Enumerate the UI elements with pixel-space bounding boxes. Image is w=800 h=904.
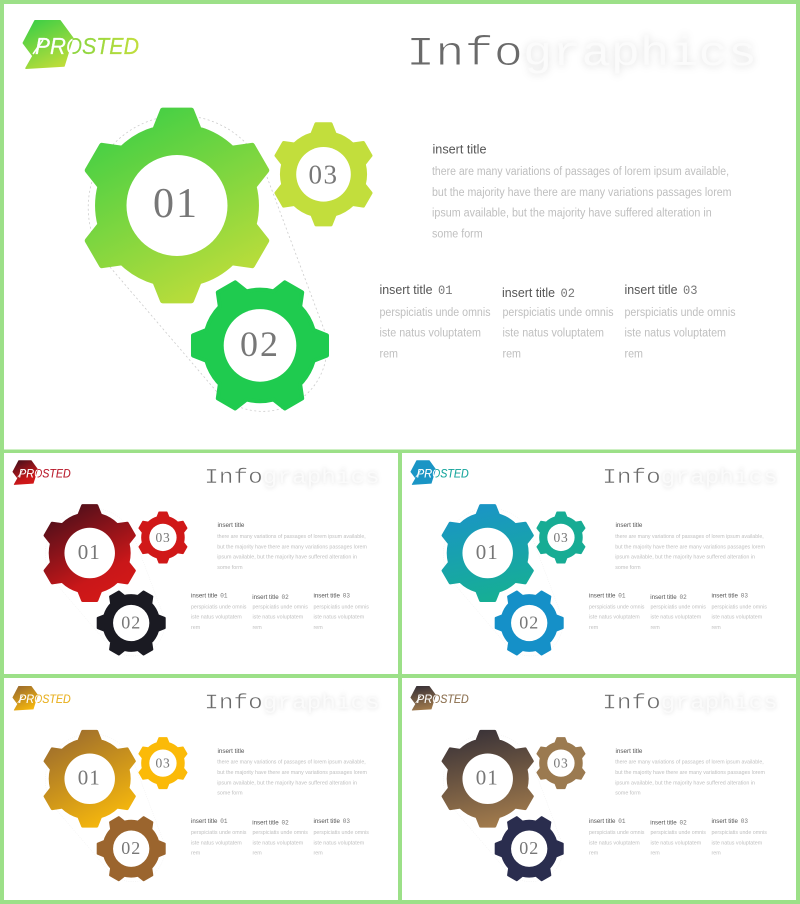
main text block: there are many variations of passages of lorem ipsum available,: [615, 534, 764, 540]
column 01: rem: [191, 625, 200, 631]
main text block: insert title: [432, 142, 487, 156]
gear 03: [537, 738, 585, 788]
main text block: some form: [217, 565, 243, 571]
gear 03: 03: [553, 756, 568, 771]
column 02: iste natus voluptatem: [252, 840, 303, 846]
column 02: iste natus voluptatem: [252, 615, 303, 621]
gear 02: 02: [240, 324, 280, 364]
main text block: there are many variations of passages of lorem ipsum available,: [432, 166, 729, 178]
main text block: ipsum available, but the majority have suffered alteration in: [217, 555, 357, 561]
column 03: rem: [624, 348, 643, 360]
column 03: perspiciatis unde omnis: [624, 307, 736, 319]
panel: red slide: [13, 461, 380, 668]
column 01: insert title: [191, 818, 218, 825]
heading: graphics: [263, 467, 380, 490]
column 01: perspiciatis unde omnis: [191, 604, 247, 610]
column 03: [624, 283, 736, 360]
heading: graphics: [523, 30, 757, 78]
gear 01: [443, 731, 532, 826]
column 03: iste natus voluptatem: [313, 840, 364, 846]
gear 02: [485, 804, 573, 893]
main text block: but the majority have there are many variations passages lorem: [217, 544, 367, 550]
heading: [406, 30, 757, 78]
panel: teal slide: [411, 461, 778, 668]
column 02: insert title: [650, 820, 677, 826]
column 03: rem: [313, 625, 323, 631]
column 01: 01: [220, 592, 228, 599]
heading: graphics: [661, 467, 778, 490]
main text block: insert title: [217, 522, 245, 529]
gear 02: 02: [121, 612, 141, 632]
gear 03: [537, 512, 585, 563]
column 03: perspiciatis unde omnis: [711, 604, 767, 610]
gear outline: [443, 508, 563, 656]
gear 01: 01: [153, 181, 199, 227]
main text block: ipsum available, but the majority have suffered alteration in: [432, 208, 712, 220]
heading: graphics: [661, 692, 778, 716]
gear 01: [88, 110, 266, 300]
logo: PR: [417, 694, 432, 706]
column 03: [711, 592, 767, 631]
column 03: 03: [343, 592, 350, 599]
column 02: insert title: [502, 286, 555, 300]
column 02: iste natus voluptatem: [502, 328, 604, 340]
column 03: [313, 818, 369, 857]
column 02: rem: [650, 851, 660, 857]
main text block: but the majority have there are many variations passages lorem: [615, 770, 765, 776]
column 02: rem: [252, 625, 262, 631]
column 01: 01: [618, 818, 626, 825]
column 03: 03: [343, 818, 350, 825]
column 01: 01: [618, 592, 626, 599]
main text block: some form: [217, 791, 243, 797]
gear 01: [443, 506, 532, 601]
column 03: 03: [741, 592, 748, 599]
main text block: there are many variations of passages of lorem ipsum available,: [615, 760, 764, 766]
column 03: iste natus voluptatem: [711, 840, 762, 846]
column 02: insert title: [252, 594, 279, 601]
main text block: ipsum available, but the majority have suffered alteration in: [615, 780, 755, 786]
logo: PR: [35, 33, 66, 59]
main text block: but the majority have there are many variations passages lorem: [615, 544, 765, 550]
column 01: [380, 283, 491, 360]
gear 02: [87, 804, 175, 893]
column 01: perspiciatis unde omnis: [589, 830, 645, 836]
column 01: rem: [589, 851, 598, 857]
column 02: 02: [560, 287, 575, 301]
column 03: insert title: [624, 283, 678, 297]
gear 02: [485, 578, 573, 668]
main text block: [432, 142, 732, 240]
main text block: [217, 522, 367, 571]
column 01: insert title: [589, 818, 616, 825]
gear 03: 03: [155, 530, 170, 545]
gear 03: 03: [155, 756, 170, 771]
main text block: insert title: [615, 748, 643, 755]
column 01: insert title: [589, 592, 616, 599]
gear 01: [45, 506, 134, 601]
column 01: perspiciatis unde omnis: [191, 830, 247, 836]
column 02: perspiciatis unde omnis: [252, 830, 308, 836]
column 02: insert title: [650, 594, 677, 601]
column 02: [252, 820, 308, 857]
column 01: perspiciatis unde omnis: [380, 307, 491, 319]
logo: PR: [19, 694, 34, 706]
column 03: rem: [313, 851, 323, 857]
main text block: ipsum available, but the majority have suffered alteration in: [217, 780, 357, 786]
column 01: [589, 592, 645, 631]
column 02: [502, 286, 614, 360]
column 02: iste natus voluptatem: [650, 615, 701, 621]
heading: graphics: [263, 692, 380, 716]
gear 03: [276, 124, 371, 225]
column 03: 03: [741, 818, 748, 825]
column 02: perspiciatis unde omnis: [252, 604, 308, 610]
heading: [602, 467, 778, 490]
column 02: 02: [281, 594, 289, 601]
logo: STED: [42, 468, 71, 480]
panel: gold slide: [13, 686, 380, 893]
column 01: [589, 818, 645, 857]
heading: Info: [602, 692, 661, 716]
heading: [204, 467, 380, 490]
column 02: iste natus voluptatem: [650, 840, 701, 846]
column 03: insert title: [313, 592, 340, 599]
gear 02: 02: [121, 838, 141, 858]
gear 01: 01: [78, 540, 101, 564]
column 03: perspiciatis unde omnis: [313, 830, 369, 836]
gear outline: [45, 734, 165, 882]
gear 01: 01: [476, 766, 499, 790]
column 01: 01: [438, 284, 452, 298]
column 02: insert title: [252, 820, 279, 826]
logo: STED: [440, 694, 469, 706]
column 01: iste natus voluptatem: [380, 328, 481, 340]
logo: [23, 21, 139, 68]
column 01: insert title: [380, 283, 433, 297]
logo: PR: [417, 468, 432, 480]
column 01: rem: [191, 851, 200, 857]
gear 03: 03: [553, 530, 568, 545]
main text block: some form: [615, 791, 641, 797]
column 01: 01: [220, 818, 228, 825]
column 03: iste natus voluptatem: [624, 328, 726, 340]
logo: O: [66, 33, 82, 59]
column 01: rem: [589, 625, 598, 631]
logo: STED: [440, 468, 469, 480]
panel: green slide: [23, 21, 757, 435]
column 03: insert title: [711, 818, 738, 825]
heading: [204, 692, 380, 716]
gear 03: 03: [308, 159, 338, 189]
main text block: insert title: [217, 748, 245, 755]
logo: STED: [42, 694, 71, 706]
column 02: [650, 820, 706, 857]
logo: PR: [19, 468, 34, 480]
logo: [411, 686, 469, 710]
gear 03: [139, 738, 187, 788]
main text block: ipsum available, but the majority have suffered alteration in: [615, 555, 755, 561]
gear 02: [172, 256, 348, 435]
gear 01: [45, 731, 134, 826]
column 03: insert title: [313, 818, 340, 825]
column 01: [191, 592, 247, 631]
column 03: iste natus voluptatem: [711, 615, 762, 621]
column 03: [711, 818, 767, 857]
column 03: [313, 592, 369, 631]
logo: [411, 461, 469, 484]
column 02: rem: [252, 851, 262, 857]
main text block: some form: [432, 228, 483, 240]
logo: O: [34, 468, 42, 480]
column 02: rem: [502, 348, 521, 360]
column 03: insert title: [711, 592, 738, 599]
heading: Info: [204, 467, 263, 490]
heading: Info: [204, 692, 263, 716]
column 02: rem: [650, 625, 660, 631]
main text block: insert title: [615, 522, 643, 529]
column 02: perspiciatis unde omnis: [650, 604, 706, 610]
logo: STED: [82, 33, 139, 59]
logo: [13, 686, 71, 710]
column 01: rem: [380, 348, 398, 360]
column 01: perspiciatis unde omnis: [589, 604, 645, 610]
gear 01: 01: [476, 540, 499, 564]
heading: [602, 692, 778, 716]
main text block: but the majority have there are many variations passages lorem: [432, 187, 732, 199]
heading: Info: [406, 30, 523, 78]
column 01: insert title: [191, 592, 218, 599]
column 02: [252, 594, 308, 631]
main text block: but the majority have there are many variations passages lorem: [217, 770, 367, 776]
column 03: rem: [711, 625, 721, 631]
main text block: there are many variations of passages of lorem ipsum available,: [217, 534, 366, 540]
column 01: iste natus voluptatem: [191, 840, 242, 846]
main text block: [615, 522, 765, 571]
gear 02: 02: [519, 612, 539, 632]
heading: Info: [602, 467, 661, 490]
logo: O: [432, 694, 440, 706]
column 01: iste natus voluptatem: [191, 615, 242, 621]
column 03: perspiciatis unde omnis: [711, 830, 767, 836]
gear 01: 01: [78, 766, 101, 790]
logo: [13, 461, 71, 484]
main text block: there are many variations of passages of lorem ipsum available,: [217, 760, 366, 766]
panel: brown slide: [411, 686, 778, 893]
column 02: 02: [679, 820, 687, 826]
column 03: rem: [711, 851, 721, 857]
column 02: [650, 594, 706, 631]
gear 02: 02: [519, 838, 539, 858]
column 02: 02: [281, 820, 289, 826]
column 03: perspiciatis unde omnis: [313, 604, 369, 610]
column 03: 03: [683, 284, 698, 298]
main text block: [615, 748, 765, 797]
column 02: perspiciatis unde omnis: [650, 830, 706, 836]
column 01: iste natus voluptatem: [589, 615, 640, 621]
logo: O: [432, 468, 440, 480]
gear outline: [88, 116, 327, 411]
column 02: 02: [679, 594, 687, 601]
main text block: some form: [615, 565, 641, 571]
column 03: iste natus voluptatem: [313, 615, 364, 621]
column 02: perspiciatis unde omnis: [502, 307, 614, 319]
column 01: [191, 818, 247, 857]
logo: O: [34, 694, 42, 706]
gear outline: [443, 734, 563, 882]
column 01: iste natus voluptatem: [589, 840, 640, 846]
main text block: [217, 748, 367, 797]
gear 03: [139, 512, 187, 563]
gear outline: [45, 508, 165, 656]
gear 02: [87, 578, 175, 668]
